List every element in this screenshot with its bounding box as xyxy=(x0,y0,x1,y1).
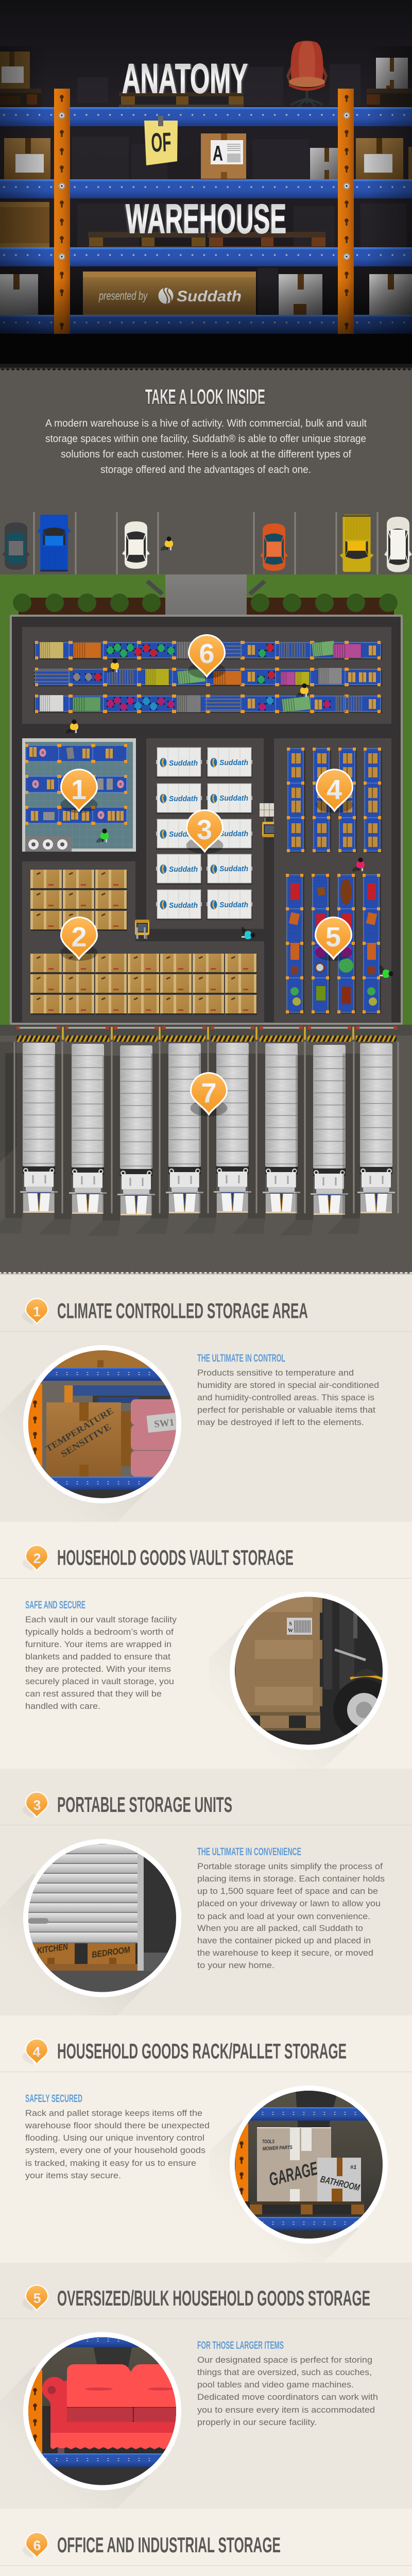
body copy: up to 1,500 square feet of space and can be xyxy=(197,1886,378,1896)
body copy: system, every one of your household goods xyxy=(25,2145,205,2155)
body copy: properly in our secure facility. xyxy=(197,2417,317,2427)
circle illustration: roll-up door: KITCHEN xyxy=(37,1942,69,1956)
body copy: flooding. Using our unique inventory control xyxy=(25,2133,204,2143)
heading: take a look inside: TAKE A LOOK INSIDE xyxy=(145,385,265,409)
body copy: the warehouse to keep it secure, or moved xyxy=(197,1948,373,1958)
body copy: typically holds a bedroom’s worth of xyxy=(25,1627,174,1637)
circle illustration: roll-up door: BEDROOM xyxy=(91,1945,131,1960)
zone 6: office and industrial storage xyxy=(22,627,391,735)
pin icon: 2 xyxy=(33,1551,41,1566)
body copy: blankets and padded to ensure that xyxy=(25,1652,170,1662)
heading: PORTABLE STORAGE UNITS xyxy=(57,1792,232,1817)
body copy: Each vault in our vault storage facility xyxy=(25,1615,177,1624)
title: WAREHOUSE: WAREHOUSE xyxy=(126,196,286,242)
body copy xyxy=(25,2108,210,2180)
title: ANATOMY: ANATOMY xyxy=(122,56,248,102)
sponsor box: presented by Suddath: Suddath xyxy=(177,288,242,305)
body copy xyxy=(25,1615,177,1711)
circle illustration: temperature sensitive boxes xyxy=(21,1345,185,1503)
shelf beams xyxy=(0,107,412,334)
pin icon: 5 xyxy=(33,2291,41,2306)
long shadow xyxy=(209,1625,358,1769)
map pin 5 xyxy=(315,917,352,961)
pin icon xyxy=(23,2532,48,2558)
subheading: SAFE AND SECURE xyxy=(25,1599,85,1611)
map pin 6: 6 xyxy=(199,638,215,669)
body copy: handled with care. xyxy=(25,1701,100,1711)
map pin 2: 2 xyxy=(71,922,87,953)
subheading: SAFELY SECURED xyxy=(25,2093,82,2105)
pin icon: 4 xyxy=(32,2044,41,2060)
lawn and landscaping xyxy=(0,574,412,1025)
body copy: to pack and load at your own convenience. xyxy=(197,1911,370,1921)
body copy: placing items in storage. Each container holds xyxy=(197,1874,385,1884)
long shadow xyxy=(209,2119,358,2262)
cardboard box with letter A xyxy=(201,133,246,179)
sponsor box: presented by Suddath xyxy=(83,272,256,318)
map pin 7 xyxy=(190,1072,228,1116)
circle illustration: temperature sensitive boxes: SENSITIVE xyxy=(59,1421,113,1459)
forklift with pallets xyxy=(260,803,279,837)
subheading: FOR THOSE LARGER ITEMS xyxy=(197,2340,284,2351)
circle illustration: garage and bathroom boxes: BATHROOM xyxy=(319,2174,361,2193)
section 1: climate controlled storage xyxy=(0,1272,412,1522)
subheading: THE ULTIMATE IN CONVENIENCE xyxy=(197,1846,301,1858)
pickup: yellow xyxy=(340,515,374,572)
body copy: may be destroyed if left to the elements. xyxy=(197,1417,364,1427)
body copy: Rack and pallet storage keeps items off the xyxy=(25,2108,202,2118)
zone 3: portable storage units: Suddath xyxy=(169,865,198,874)
section 4: rack and pallet storage xyxy=(0,2015,412,2263)
zone 3: portable storage units: Suddath xyxy=(169,830,198,839)
zone 3: portable storage units xyxy=(146,738,279,929)
warehouse floor plan xyxy=(10,615,403,1025)
person xyxy=(160,536,173,552)
circle illustration: garage and bathroom boxes: #1 xyxy=(350,2164,356,2171)
zone 3: portable storage units: Suddath xyxy=(219,794,248,803)
body copy: placed on your driveway or lawn to allow you xyxy=(197,1899,381,1908)
third shelf boxes and pallets xyxy=(0,202,325,249)
circle illustration: vault and forklift: W xyxy=(288,1628,293,1634)
map pin 7: 7 xyxy=(201,1078,217,1109)
car: white xyxy=(122,521,150,569)
title pallet xyxy=(119,92,244,107)
sponsor box: presented by Suddath: presented by xyxy=(98,289,148,302)
hero darkening xyxy=(0,46,412,335)
pin icon xyxy=(23,1545,48,1571)
pin icon xyxy=(23,1298,48,1325)
intro text: storage offered and the advantages of each one. xyxy=(100,464,311,476)
body copy: your items stay secure. xyxy=(25,2171,121,2180)
body copy: securely placed in vault storage, you xyxy=(25,1676,174,1686)
car: orange xyxy=(260,523,288,571)
zone 3: portable storage units: Suddath xyxy=(219,865,248,873)
body copy xyxy=(197,2355,378,2427)
pin icon xyxy=(23,2038,48,2065)
map pin 4: 4 xyxy=(327,774,342,805)
map pin 6 xyxy=(188,634,226,679)
section 2: household goods vault storage xyxy=(0,1522,412,1769)
pin icon: 6 xyxy=(33,2538,41,2553)
asphalt panel: intro and parking xyxy=(0,364,412,1272)
body copy xyxy=(197,1861,385,1970)
map pin 1 xyxy=(60,769,98,813)
intro text: A modern warehouse is a hive of activity. With commercial, bulk and vault xyxy=(45,418,367,429)
map pin 3 xyxy=(186,809,224,854)
background shelving blocks xyxy=(72,64,407,314)
circle illustration: vault and forklift: S xyxy=(289,1621,292,1627)
car: white SUV xyxy=(384,517,412,572)
intro text: storage spaces within one facility, Suddath® is able to offer unique storage xyxy=(45,433,366,445)
loading dock xyxy=(0,1025,412,1272)
zone 1: climate controlled room xyxy=(22,738,136,852)
body copy: things that are oversized, such as couches, xyxy=(197,2367,372,2377)
chair xyxy=(286,41,328,108)
pin icon xyxy=(23,1792,48,1818)
dock bumpers and hazard stripes xyxy=(16,1026,397,1042)
body copy: humidity are stored in special air-conditioned xyxy=(197,1380,379,1390)
long shadow xyxy=(0,2366,150,2509)
car: teal xyxy=(2,522,30,570)
circle illustration: red sofa xyxy=(21,2332,185,2490)
forklift xyxy=(135,920,149,939)
zone 3: portable storage units: Suddath xyxy=(219,901,248,909)
body copy xyxy=(197,1368,379,1427)
section 3: portable storage units xyxy=(0,1792,412,2000)
map pin 1: 1 xyxy=(71,774,87,805)
map pin 5: 5 xyxy=(325,922,341,953)
second shelf boxes xyxy=(4,138,412,179)
pin icon: 3 xyxy=(33,1798,41,1813)
zone 2: household goods vault storage xyxy=(22,861,264,1022)
parking lot xyxy=(2,512,412,574)
pin icon xyxy=(23,2284,48,2311)
circle illustration: temperature sensitive boxes: SW1 xyxy=(153,1417,175,1430)
zone 3: portable storage units: Suddath xyxy=(219,758,248,767)
section 5: oversized bulk storage xyxy=(0,2284,412,2493)
circle illustration: vault and forklift xyxy=(230,1592,395,1750)
sticky note: OF xyxy=(144,116,178,165)
body copy: can rest assured that they will be xyxy=(25,1689,162,1699)
circle illustration: temperature sensitive boxes: TEMPERATURE xyxy=(44,1405,115,1454)
body copy: perfect for perishable or valuable items that xyxy=(197,1405,375,1415)
body copy: you to ensure every item is accommodated xyxy=(197,2405,375,2415)
body copy: Products sensitive to temperature and xyxy=(197,1368,354,1378)
bottom shelf boxes xyxy=(0,274,412,317)
zones 4 and 5: rack and bulk storage xyxy=(274,738,393,1022)
zone 5 racks with furniture xyxy=(286,874,381,1014)
body copy: to your new home. xyxy=(197,1960,274,1970)
long shadow xyxy=(0,1873,150,2015)
body copy: pool tables and video game machines. xyxy=(197,2380,354,2389)
pin icon: 1 xyxy=(33,1304,41,1319)
trucks xyxy=(0,1043,395,1236)
long shadow xyxy=(0,1379,150,1522)
zone 3: portable storage units: Suddath xyxy=(169,794,198,803)
body copy: is tracked, making it easy for us to ensure xyxy=(25,2158,196,2168)
circle illustration: garage and bathroom boxes: GARAGE xyxy=(267,2158,320,2190)
sticky note: OF: OF xyxy=(150,127,171,158)
body copy: furniture. Your items are wrapped in xyxy=(25,1639,171,1649)
intro text: solutions for each customer. Here is a look at the different types of xyxy=(61,449,351,460)
body copy: warehouse floor should there be unexpected xyxy=(25,2121,210,2130)
body copy: have the container picked up and placed in xyxy=(197,1936,371,1945)
zone 3: portable storage units: Suddath xyxy=(219,829,248,838)
intro text xyxy=(45,418,367,476)
body copy: they are protected. With your items xyxy=(25,1664,171,1674)
body copy: Dedicated move coordinators can work with xyxy=(197,2392,378,2402)
circle illustration: roll-up door xyxy=(23,1839,181,1997)
bay lane lines xyxy=(14,1042,398,1213)
body copy: Our designated space is perfect for storing xyxy=(197,2355,372,2365)
cardboard box with letter A: A xyxy=(213,141,223,165)
top shelf boxes xyxy=(0,52,412,107)
circle illustration: garage and bathroom boxes: MOWER PARTS xyxy=(263,2145,293,2152)
circle illustration: garage and bathroom boxes: TOOLS xyxy=(262,2139,274,2145)
body copy: Portable storage units simplify the process of xyxy=(197,1861,383,1871)
zone 3: portable storage units: Suddath xyxy=(169,759,198,768)
circle illustration: garage and bathroom boxes xyxy=(227,2086,391,2244)
body copy: When you are all packed, call Suddath to xyxy=(197,1923,363,1933)
subheading: THE ULTIMATE IN CONTROL xyxy=(197,1352,285,1364)
section 6: office and industrial storage xyxy=(0,2509,412,2576)
pickup: blue xyxy=(37,515,71,572)
zone 4 racks xyxy=(287,748,382,853)
shelf uprights xyxy=(54,89,354,334)
hero panel: warehouse shelving xyxy=(0,0,412,368)
body copy: and humidity-controlled areas. This space is xyxy=(197,1393,374,1402)
zone 3: portable storage units: Suddath xyxy=(169,901,198,910)
map pin 3: 3 xyxy=(197,815,212,845)
map pin 4 xyxy=(316,769,353,813)
map pin 2 xyxy=(60,917,98,961)
